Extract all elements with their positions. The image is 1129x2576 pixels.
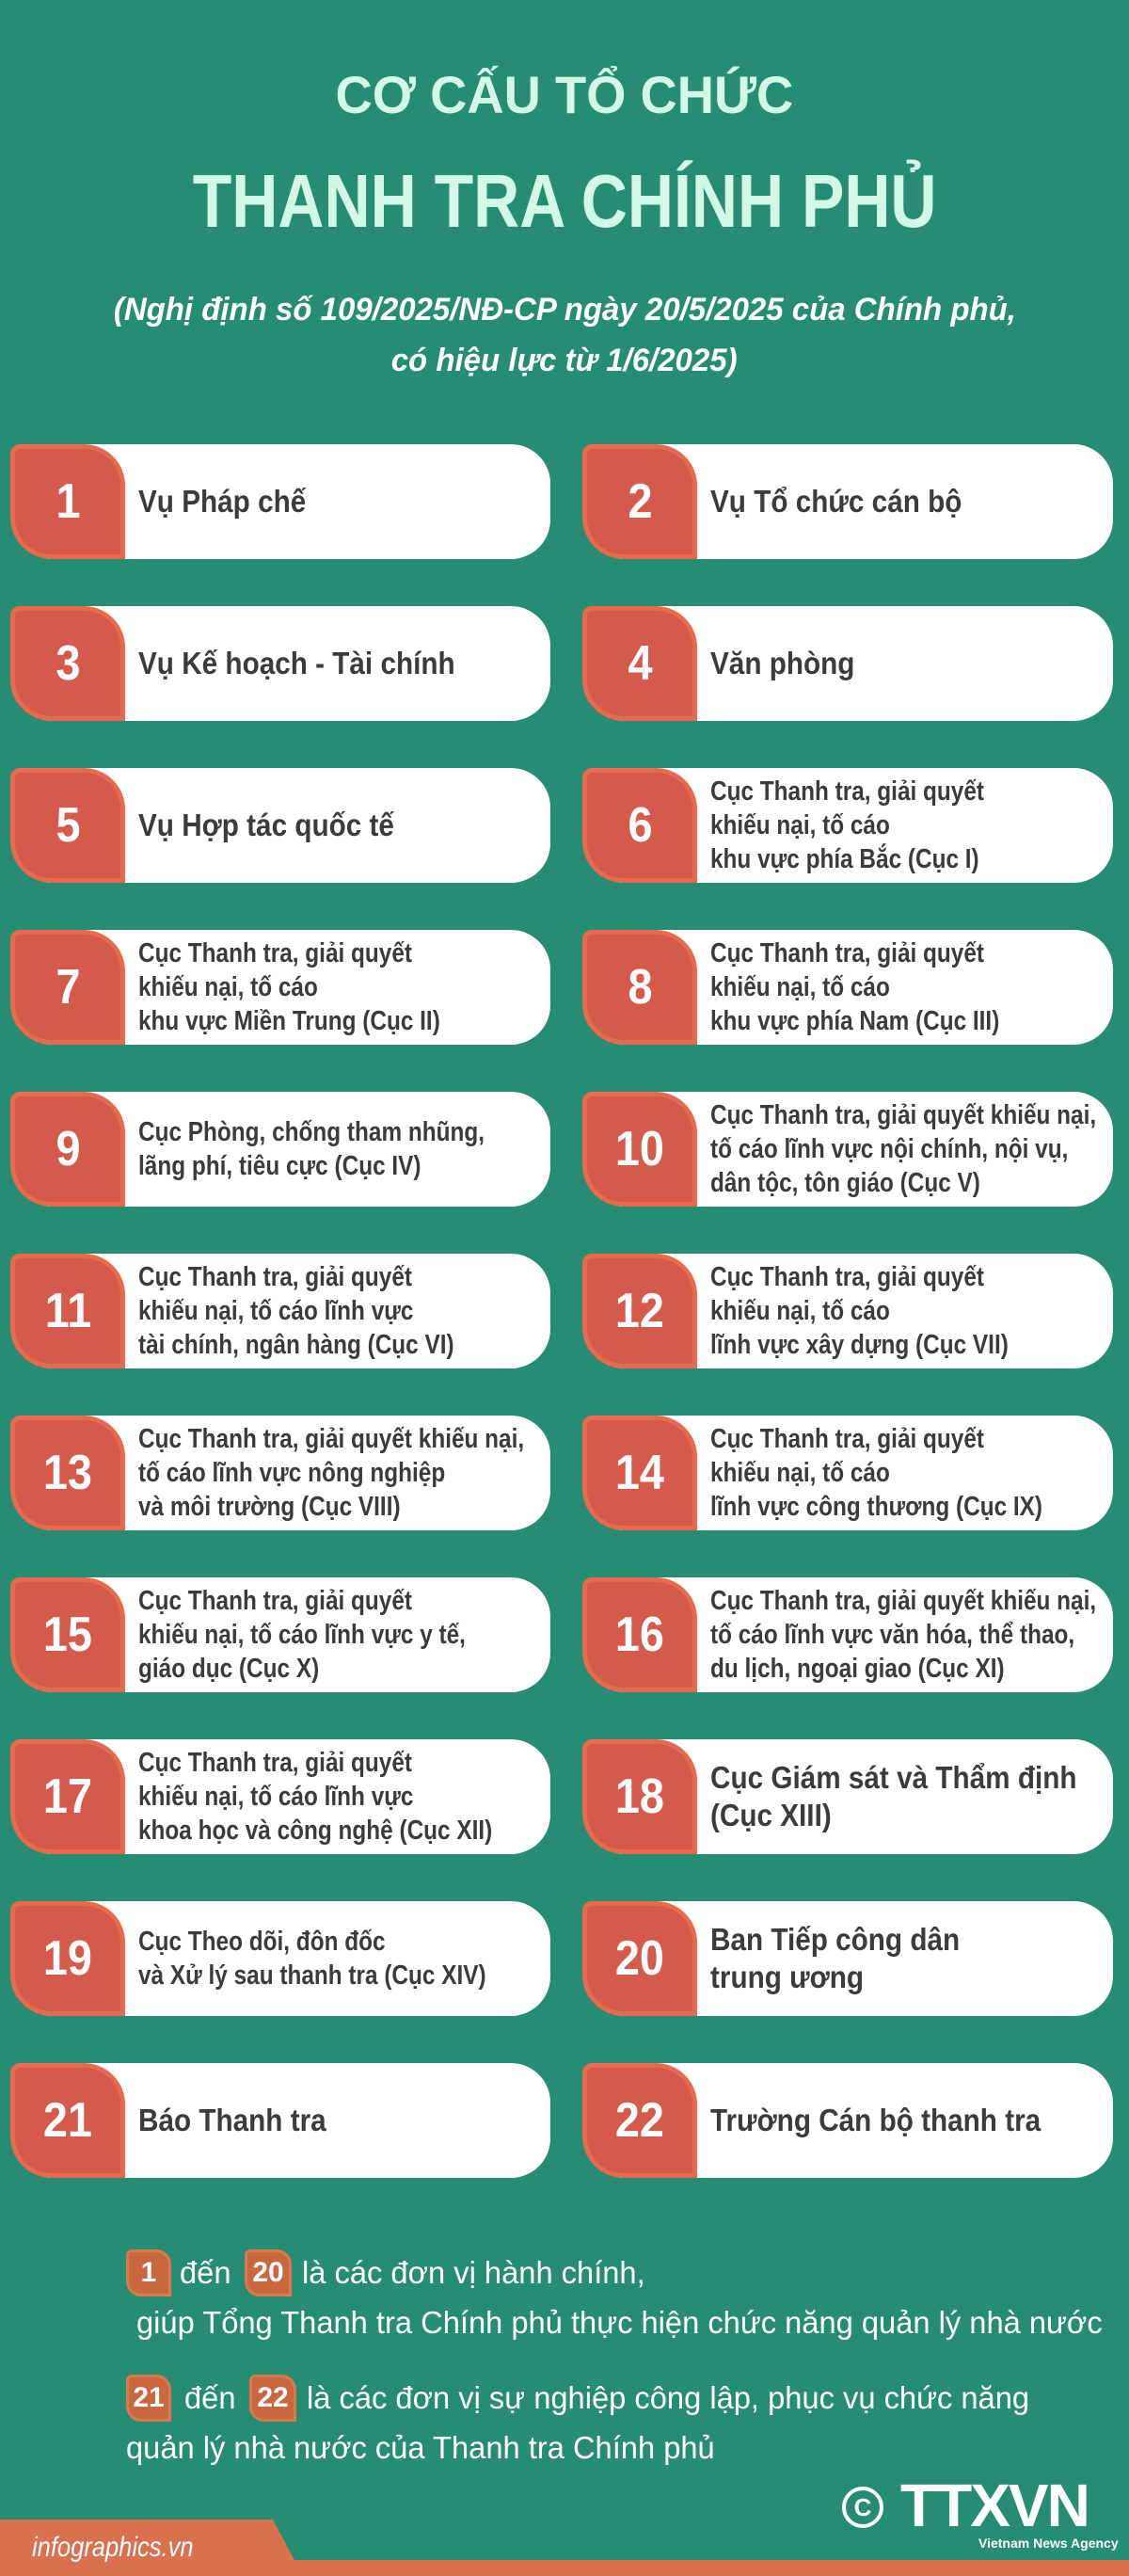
card 18: 18 xyxy=(615,1769,664,1824)
card 8 xyxy=(585,930,1113,1045)
note badge 20: 20 xyxy=(252,2257,284,2288)
card 15: 15 xyxy=(43,1608,92,1662)
card 13: và môi trường (Cục VIII) xyxy=(138,1492,401,1522)
card 8: 8 xyxy=(628,960,652,1015)
card 3: Vụ Kế hoạch - Tài chính xyxy=(138,646,455,680)
card 12: 12 xyxy=(615,1284,664,1338)
card 17: Cục Thanh tra, giải quyết xyxy=(138,1748,412,1778)
card 22: Trường Cán bộ thanh tra xyxy=(710,2103,1041,2137)
card 8: khiếu nại, tố cáo xyxy=(710,972,890,1002)
card 6: Cục Thanh tra, giải quyết xyxy=(710,776,984,807)
card 12: Cục Thanh tra, giải quyết xyxy=(710,1262,984,1292)
card 7: khiếu nại, tố cáo xyxy=(138,972,318,1002)
card 21: 21 xyxy=(43,2093,92,2148)
card 22 xyxy=(585,2063,1113,2178)
note badge 21 xyxy=(126,2375,171,2422)
card 15 xyxy=(13,1577,550,1692)
card 20: trung ương xyxy=(710,1960,864,1994)
title line 2: THANH TRA CHÍNH PHỦ xyxy=(193,159,936,243)
card 3 xyxy=(13,606,550,721)
card 6 xyxy=(585,768,1113,883)
card 4 xyxy=(585,606,1113,721)
card 10: tố cáo lĩnh vực nội chính, nội vụ, xyxy=(710,1134,1068,1164)
card 14: Cục Thanh tra, giải quyết xyxy=(710,1424,984,1454)
card 2 xyxy=(585,444,1113,559)
footer orange band xyxy=(0,2520,1129,2576)
card 21: Báo Thanh tra xyxy=(138,2103,326,2137)
card 12: lĩnh vực xây dựng (Cục VII) xyxy=(710,1330,1009,1360)
card 5: 5 xyxy=(56,798,80,853)
card 12: khiếu nại, tố cáo xyxy=(710,1296,890,1326)
note text line 3a: đến xyxy=(184,2380,236,2415)
card 5: Vụ Hợp tác quốc tế xyxy=(138,808,394,842)
card 16 xyxy=(585,1577,1113,1692)
card 4: Văn phòng xyxy=(710,646,854,680)
card 14 xyxy=(585,1416,1113,1530)
card 2: 2 xyxy=(628,474,652,529)
card 20: 20 xyxy=(615,1931,664,1986)
card 19: Cục Theo dõi, đôn đốc xyxy=(138,1927,386,1957)
card 13 xyxy=(13,1416,550,1530)
note badge 21: 21 xyxy=(133,2382,165,2413)
card 6: khiếu nại, tố cáo xyxy=(710,810,890,840)
note badge 22 xyxy=(249,2375,296,2422)
card 7 xyxy=(13,930,550,1045)
card 13: Cục Thanh tra, giải quyết khiếu nại, xyxy=(138,1424,524,1454)
card 15: khiếu nại, tố cáo lĩnh vực y tế, xyxy=(138,1620,466,1650)
card 9: lãng phí, tiêu cực (Cục IV) xyxy=(138,1151,421,1181)
note text line 4: quản lý nhà nước của Thanh tra Chính phủ xyxy=(126,2430,715,2465)
note text line 1b: là các đơn vị hành chính, xyxy=(302,2255,645,2290)
card 6: khu vực phía Bắc (Cục I) xyxy=(710,844,979,874)
note badge 20 xyxy=(245,2249,292,2296)
card 19: và Xử lý sau thanh tra (Cục XIV) xyxy=(138,1960,486,1991)
agency text: Vietnam News Agency xyxy=(978,2536,1119,2551)
card 9 xyxy=(13,1092,550,1207)
card 18: (Cục XIII) xyxy=(710,1798,832,1832)
card 19: 19 xyxy=(43,1931,92,1986)
note badge 22: 22 xyxy=(257,2382,289,2413)
card 5 xyxy=(13,768,550,883)
footer site text: infographics.vn xyxy=(32,2532,194,2563)
logo TTXVN xyxy=(842,2472,1119,2551)
card 2: Vụ Tổ chức cán bộ xyxy=(710,484,962,519)
note block xyxy=(126,2249,1103,2465)
card 10: Cục Thanh tra, giải quyết khiếu nại, xyxy=(710,1100,1096,1130)
subtitle xyxy=(113,292,1016,378)
note text line 1: đến xyxy=(180,2255,231,2290)
card 10 xyxy=(585,1092,1113,1207)
card 14: lĩnh vực công thương (Cục IX) xyxy=(710,1492,1042,1522)
card 15: giáo dục (Cục X) xyxy=(138,1654,319,1684)
logo text: TTXVN xyxy=(900,2472,1089,2539)
card 8: khu vực phía Nam (Cục III) xyxy=(710,1006,999,1036)
card 13: 13 xyxy=(43,1446,92,1500)
title line 1: CƠ CẤU TỔ CHỨC xyxy=(336,65,793,124)
card 15: Cục Thanh tra, giải quyết xyxy=(138,1586,412,1616)
card 7: Cục Thanh tra, giải quyết xyxy=(138,938,412,968)
subtitle: có hiệu lực từ 1/6/2025) xyxy=(391,343,738,378)
card 16: 16 xyxy=(615,1608,664,1662)
card 12 xyxy=(585,1254,1113,1368)
note text line 2: giúp Tổng Thanh tra Chính phủ thực hiện chức năng quản lý nhà nước xyxy=(136,2305,1103,2340)
card 16: du lịch, ngoại giao (Cục XI) xyxy=(710,1654,1005,1684)
card 11: 11 xyxy=(44,1284,91,1338)
card 1 xyxy=(13,444,550,559)
card 11: tài chính, ngân hàng (Cục VI) xyxy=(138,1330,454,1360)
subtitle: (Nghị định số 109/2025/NĐ-CP ngày 20/5/2025 của Chính phủ, xyxy=(113,292,1016,328)
note badge 1: 1 xyxy=(141,2257,156,2288)
card 10: dân tộc, tôn giáo (Cục V) xyxy=(710,1168,980,1198)
card 20: Ban Tiếp công dân xyxy=(710,1922,960,1957)
card 13: tố cáo lĩnh vực nông nghiệp xyxy=(138,1458,445,1488)
card 14: 14 xyxy=(615,1446,664,1500)
card 8: Cục Thanh tra, giải quyết xyxy=(710,938,984,968)
card 3: 3 xyxy=(56,636,80,691)
card 16: Cục Thanh tra, giải quyết khiếu nại, xyxy=(710,1586,1096,1616)
card 18 xyxy=(585,1739,1113,1854)
copyright icon: C xyxy=(854,2493,871,2521)
card 1: 1 xyxy=(56,474,80,529)
card 20 xyxy=(585,1901,1113,2016)
card 14: khiếu nại, tố cáo xyxy=(710,1458,890,1488)
card 9: 9 xyxy=(56,1122,80,1176)
card 17: khoa học và công nghệ (Cục XII) xyxy=(138,1816,492,1846)
card 4: 4 xyxy=(628,636,652,691)
card 6: 6 xyxy=(628,798,652,853)
card 10: 10 xyxy=(615,1122,664,1176)
card 11 xyxy=(13,1254,550,1368)
card 19 xyxy=(13,1901,550,2016)
card 17: 17 xyxy=(43,1769,92,1824)
card 17 xyxy=(13,1739,550,1854)
card 7: khu vực Miền Trung (Cục II) xyxy=(138,1006,440,1036)
card 1: Vụ Pháp chế xyxy=(138,484,306,519)
note badge 1 xyxy=(126,2249,171,2296)
note text line 3: là các đơn vị sự nghiệp công lập, phục vụ chức năng xyxy=(307,2380,1029,2415)
card 22: 22 xyxy=(615,2093,664,2148)
card 21 xyxy=(13,2063,550,2178)
card 18: Cục Giám sát và Thẩm định xyxy=(710,1760,1077,1795)
card 11: Cục Thanh tra, giải quyết xyxy=(138,1262,412,1292)
card 16: tố cáo lĩnh vực văn hóa, thể thao, xyxy=(710,1620,1074,1650)
card 11: khiếu nại, tố cáo lĩnh vực xyxy=(138,1296,413,1326)
card 7: 7 xyxy=(56,960,80,1015)
card 9: Cục Phòng, chống tham nhũng, xyxy=(138,1117,485,1147)
copyright icon xyxy=(842,2487,883,2528)
card 17: khiếu nại, tố cáo lĩnh vực xyxy=(138,1782,413,1812)
